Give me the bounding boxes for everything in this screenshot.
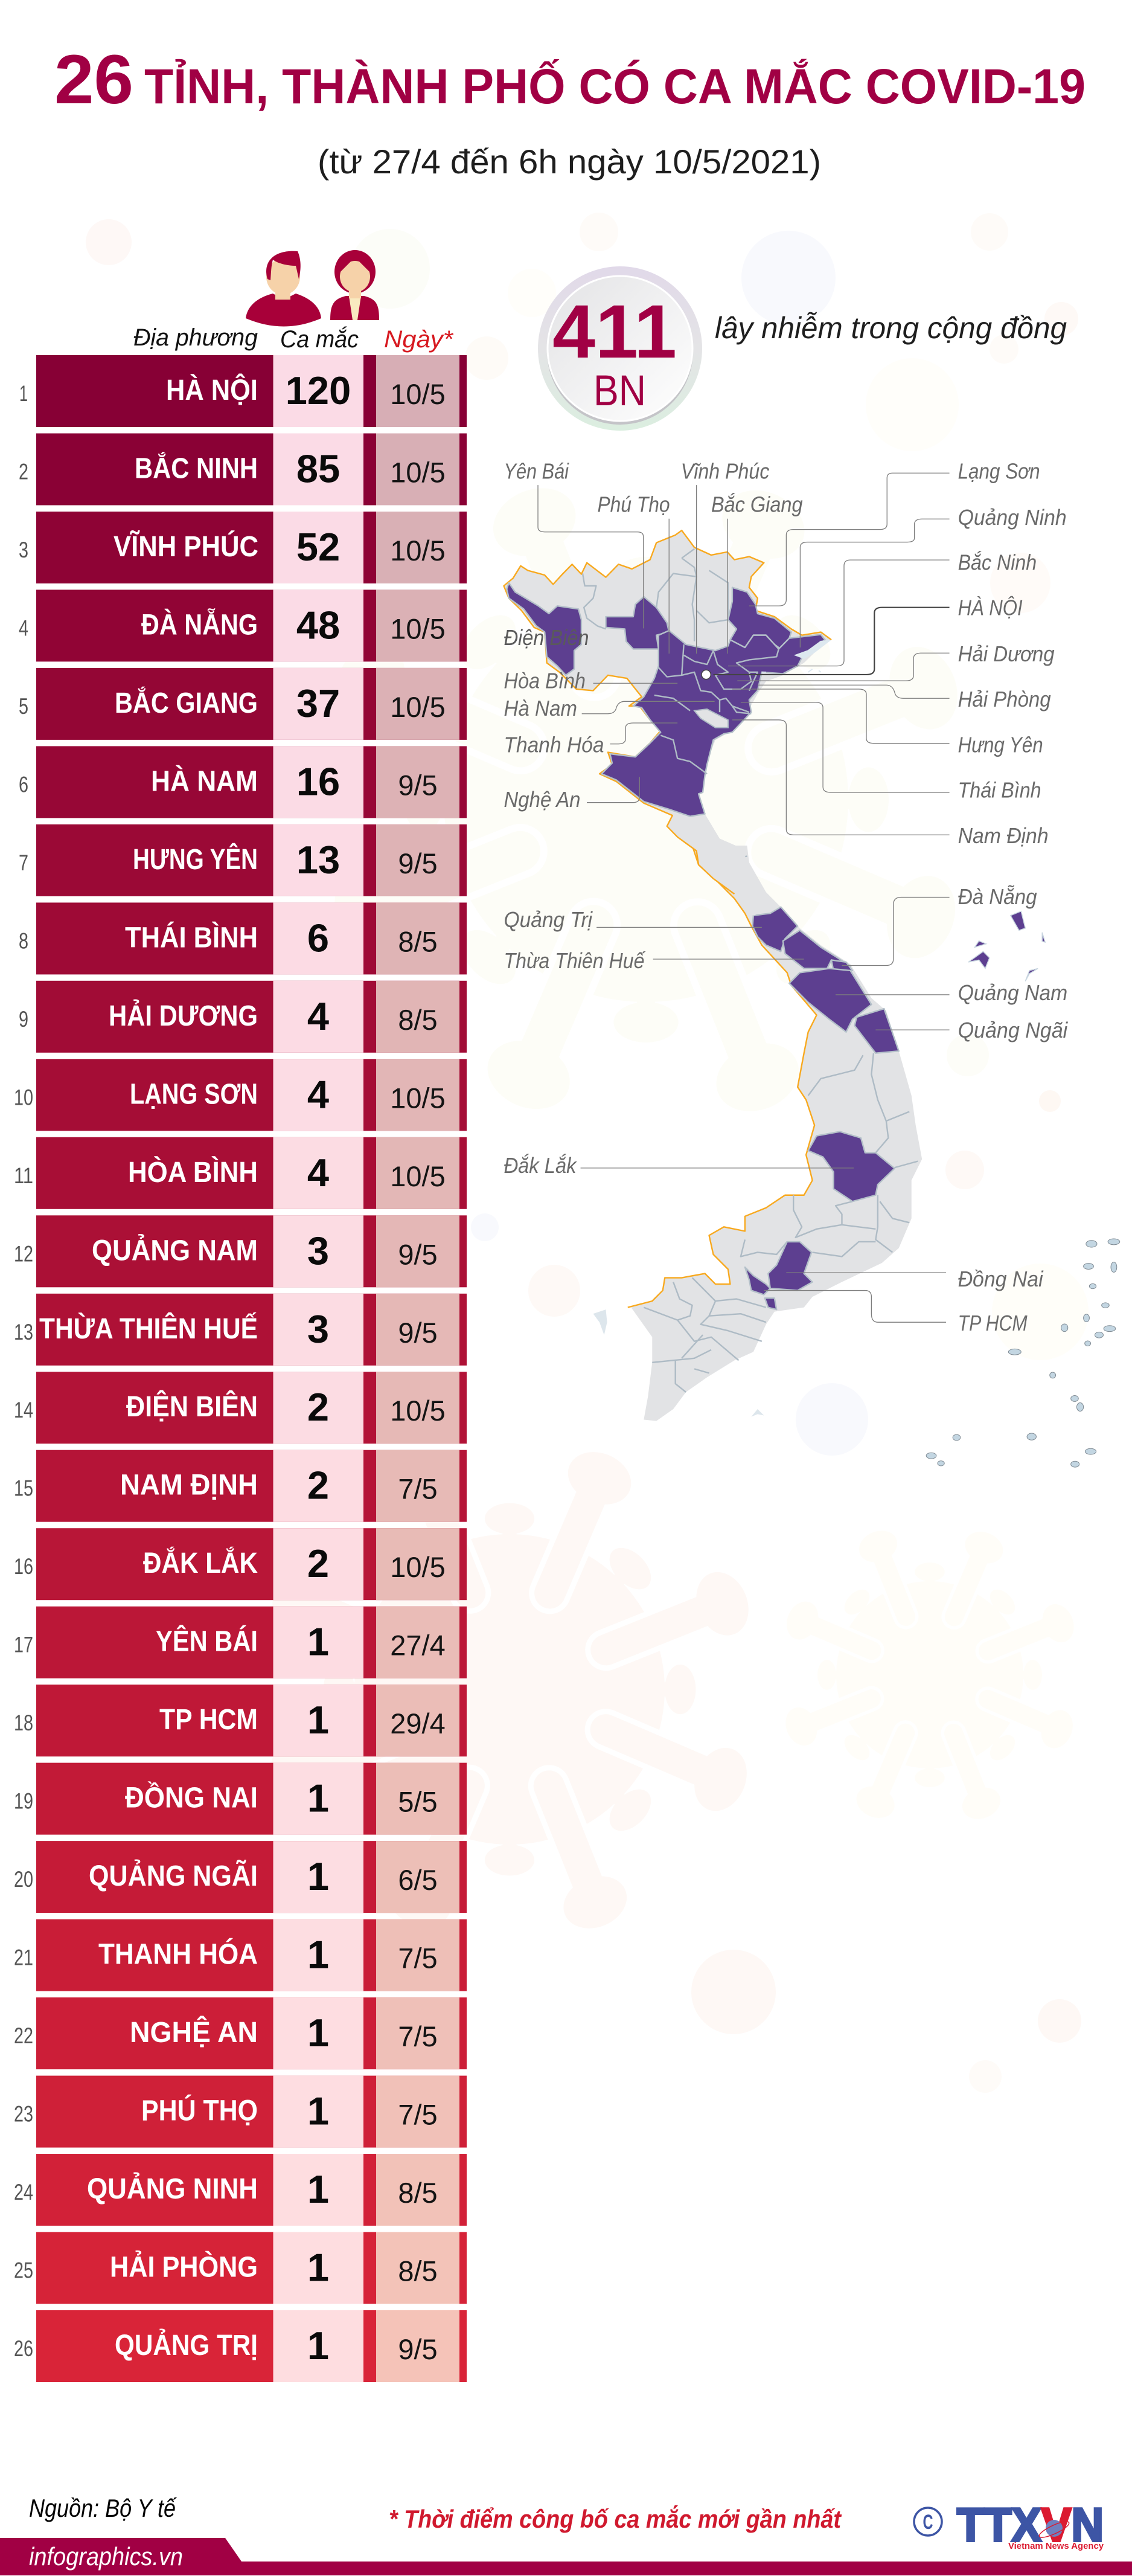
row 3: 3 <box>19 538 28 562</box>
row 14 <box>14 1372 467 1444</box>
column headings: Địa phương <box>133 324 258 351</box>
row 20: 1 <box>307 1854 329 1898</box>
map labels: Quảng Nam <box>958 980 1067 1005</box>
row 22: 1 <box>307 2011 329 2055</box>
map of Vietnam: north <box>504 473 950 916</box>
callout: 411 BN badge: 411 <box>552 290 677 374</box>
table of provinces <box>14 355 467 2382</box>
row 5: BẮC GIANG <box>115 686 258 719</box>
row 3: 10/5 <box>390 535 446 567</box>
row 15: 15 <box>14 1476 33 1501</box>
row 8 <box>19 902 467 974</box>
row 21: 21 <box>14 1945 33 1970</box>
row 26 <box>14 2310 467 2382</box>
row 5: 37 <box>296 681 340 725</box>
row 5: 5 <box>19 694 28 719</box>
map labels <box>504 458 1068 1335</box>
row 23: 1 <box>307 2089 329 2133</box>
row 14: 14 <box>14 1398 33 1422</box>
map labels: Đà Nẵng <box>958 884 1037 909</box>
row 25: 25 <box>14 2258 33 2283</box>
row 6 <box>19 746 467 818</box>
row 1 <box>19 355 467 427</box>
row 7: 9/5 <box>398 847 438 879</box>
Quảng Nam <box>789 968 871 1032</box>
leader lines: central and south <box>581 898 950 1322</box>
row 25 <box>14 2232 467 2304</box>
Ninh Bình (grey) <box>694 709 728 728</box>
column headings: Ngày* <box>384 326 453 353</box>
Yên Bái <box>606 597 669 649</box>
footnote: * Thời điểm công bố ca mắc mới gần nhất <box>389 2504 842 2533</box>
map of Vietnam: south and central <box>581 846 1120 1467</box>
Đồng Nai <box>768 1242 813 1291</box>
row 18: TP HCM <box>159 1704 258 1736</box>
map labels: Thái Bình <box>958 778 1041 802</box>
map labels: Phú Thọ <box>598 492 670 517</box>
row 21 <box>14 1919 467 1991</box>
row 4 <box>19 589 467 661</box>
row 25: 1 <box>307 2246 329 2289</box>
row 6: 9/5 <box>398 769 438 801</box>
Red River delta and Thanh Hóa, Nghệ An <box>601 631 825 817</box>
row 22: 7/5 <box>398 2020 438 2052</box>
row 19: 1 <box>307 1776 329 1820</box>
map labels: HÀ NỘI <box>958 596 1023 620</box>
row 13: 13 <box>14 1320 33 1344</box>
row 19: ĐỒNG NAI <box>125 1781 258 1814</box>
row 12: QUẢNG NAM <box>92 1233 258 1267</box>
source: Nguồn: Bộ Y tế <box>29 2494 177 2522</box>
marker: Hà Nội <box>702 670 711 679</box>
map labels: Đồng Nai <box>958 1267 1044 1291</box>
row 19 <box>14 1763 467 1835</box>
row 10 <box>14 1059 467 1131</box>
row 3 <box>19 512 467 583</box>
row 16: 10/5 <box>390 1551 446 1583</box>
row 7 <box>19 824 467 896</box>
row 23: 7/5 <box>398 2099 438 2131</box>
callout: 411 BN badge <box>538 266 702 431</box>
row 21: THANH HÓA <box>98 1938 258 1971</box>
map labels: Bắc Ninh <box>958 550 1037 575</box>
map labels: Đắk Lắk <box>504 1153 577 1178</box>
map labels: TP HCM <box>958 1311 1028 1335</box>
row 2 <box>19 434 467 505</box>
background decoration: faint dots and viruses <box>86 213 1090 2093</box>
map labels: Hưng Yên <box>958 732 1043 757</box>
row 2: 2 <box>19 459 28 484</box>
map labels: Thừa Thiên Huế <box>504 948 646 973</box>
row 17: YÊN BÁI <box>156 1625 258 1658</box>
row 19: 19 <box>14 1789 33 1814</box>
row 15: NAM ĐỊNH <box>120 1469 258 1502</box>
row 26: QUẢNG TRỊ <box>115 2328 258 2362</box>
row 20: 20 <box>14 1867 33 1892</box>
row 22: NGHỆ AN <box>130 2016 258 2049</box>
map labels: Hà Nam <box>504 696 577 721</box>
row 7: 7 <box>19 850 28 875</box>
title <box>54 41 1086 118</box>
row 22 <box>14 1997 467 2069</box>
Điện Biên <box>507 583 581 675</box>
map labels: Hải Dương <box>958 641 1055 666</box>
row 10: 4 <box>307 1072 329 1116</box>
row 23 <box>14 2076 467 2148</box>
row 4: 4 <box>19 615 28 640</box>
islands: Hoàng Sa <box>968 911 1045 981</box>
row 9: 8/5 <box>398 1004 438 1036</box>
row 20: QUẢNG NGÃI <box>89 1859 258 1892</box>
row 16 <box>14 1528 467 1600</box>
row 1: HÀ NỘI <box>166 373 258 406</box>
row 19: 5/5 <box>398 1786 438 1818</box>
row 4: 48 <box>296 603 340 647</box>
row 24: 1 <box>307 2167 329 2211</box>
row 16: 2 <box>307 1541 329 1585</box>
row 24: 24 <box>14 2180 33 2205</box>
row 10: 10 <box>14 1085 33 1110</box>
row 26: 26 <box>14 2336 33 2361</box>
Quảng Trị <box>752 907 798 951</box>
Lạng Sơn <box>728 588 791 649</box>
map labels: Hải Phòng <box>958 687 1051 711</box>
row 4: ĐÀ NẴNG <box>141 608 258 641</box>
row 9: 9 <box>19 1007 28 1032</box>
row 11: 10/5 <box>390 1160 446 1192</box>
footer website: infographics.vn <box>29 2542 183 2571</box>
row 18 <box>14 1685 467 1756</box>
row 8: 8/5 <box>398 925 438 957</box>
row 9: 4 <box>307 994 329 1038</box>
row 22: 22 <box>14 2023 33 2048</box>
row 5 <box>19 668 467 740</box>
row 11: 4 <box>307 1151 329 1195</box>
map labels: Quảng Ninh <box>958 505 1067 530</box>
map labels: Nam Định <box>958 823 1049 848</box>
row 17: 17 <box>14 1633 33 1657</box>
icon: woman <box>330 250 379 320</box>
row 8: 6 <box>307 916 329 960</box>
row 18: 18 <box>14 1710 33 1735</box>
map labels: Vĩnh Phúc <box>681 458 769 483</box>
row 24: QUẢNG NINH <box>87 2172 258 2205</box>
logo: TTXVN: Vietnam News Agency <box>1008 2541 1104 2551</box>
callout text: lây nhiễm trong cộng đồng <box>715 311 1067 345</box>
row 21: 7/5 <box>398 1942 438 1974</box>
row 13 <box>14 1294 467 1366</box>
row 1: 1 <box>19 381 28 406</box>
Quảng Ninh islets <box>762 641 830 672</box>
row 20: 6/5 <box>398 1864 438 1896</box>
row 6: HÀ NAM <box>151 765 258 797</box>
islands: Phú Quốc and Côn Đảo <box>593 1309 764 1417</box>
callout: 411 BN badge: BN <box>593 367 646 415</box>
map labels: Nghệ An <box>504 787 581 812</box>
map labels: Bắc Giang <box>711 492 803 517</box>
row 3: VĨNH PHÚC <box>114 530 258 563</box>
row 26: 1 <box>307 2324 329 2368</box>
icon: man <box>246 251 321 326</box>
row 8: THÁI BÌNH <box>125 921 258 954</box>
row 25: 8/5 <box>398 2255 438 2287</box>
row 20 <box>14 1841 467 1913</box>
TP HCM <box>745 1267 776 1309</box>
row 12: 9/5 <box>398 1238 438 1270</box>
row 2: BẮC NINH <box>135 452 258 484</box>
row 17: 27/4 <box>390 1630 446 1662</box>
row 12: 3 <box>307 1229 329 1273</box>
row 16: 16 <box>14 1554 33 1579</box>
row 2: 85 <box>296 447 340 490</box>
title: TỈNH, THÀNH PHỐ CÓ CA MẮC COVID-19 <box>144 59 1086 114</box>
row 8: 8 <box>19 928 28 953</box>
islands: Trường Sa <box>926 1239 1120 1467</box>
row 23: PHÚ THỌ <box>141 2094 258 2127</box>
row 3: 52 <box>296 525 340 569</box>
row 21: 1 <box>307 1933 329 1977</box>
footer bar <box>0 2538 1132 2575</box>
row 11: 11 <box>14 1163 33 1188</box>
row 5: 10/5 <box>390 691 446 723</box>
row 2: 10/5 <box>390 457 446 488</box>
Đà Nẵng <box>831 960 852 971</box>
row 10: LẠNG SƠN <box>130 1078 258 1110</box>
row 12 <box>14 1215 467 1287</box>
row 14: 2 <box>307 1385 329 1429</box>
title: 26 <box>54 41 133 118</box>
row 14: ĐIỆN BIÊN <box>126 1390 258 1423</box>
Thừa Thiên Huế <box>783 930 850 968</box>
leader lines: north <box>538 473 950 835</box>
row 1: 120 <box>286 368 351 413</box>
row 7: 13 <box>296 838 340 882</box>
row 4: 10/5 <box>390 612 446 644</box>
row 12: 12 <box>14 1241 33 1266</box>
map labels: Quảng Ngãi <box>958 1018 1068 1042</box>
row 14: 10/5 <box>390 1395 446 1427</box>
row 16: ĐẮK LẮK <box>143 1546 258 1579</box>
row 23: 23 <box>14 2102 33 2127</box>
row 24 <box>14 2154 467 2226</box>
row 18: 29/4 <box>390 1707 446 1739</box>
map labels: Hòa Bình <box>504 668 586 693</box>
row 24: 8/5 <box>398 2177 438 2209</box>
row 15: 7/5 <box>398 1473 438 1505</box>
row 7: HƯNG YÊN <box>133 843 258 876</box>
map labels: Điện Biên <box>504 625 589 650</box>
row 1: 10/5 <box>390 378 446 410</box>
row 17: 1 <box>307 1620 329 1664</box>
row 26: 9/5 <box>398 2333 438 2365</box>
map labels: Lạng Sơn <box>958 458 1040 483</box>
row 13: 3 <box>307 1307 329 1351</box>
row 15 <box>14 1450 467 1522</box>
Đắk Lắk <box>808 1132 895 1201</box>
row 13: THỪA THIÊN HUẾ <box>39 1312 258 1345</box>
Quảng Ngãi <box>854 1009 899 1053</box>
row 25: HẢI PHÒNG <box>110 2250 258 2283</box>
row 15: 2 <box>307 1463 329 1508</box>
logo: TTXVN: C <box>923 2511 933 2534</box>
row 18: 1 <box>307 1698 329 1742</box>
subtitle: (từ 27/4 đến 6h ngày 10/5/2021) <box>318 143 821 181</box>
column headings <box>133 324 453 353</box>
map labels: Thanh Hóa <box>504 732 604 757</box>
row 9: HẢI DƯƠNG <box>109 999 258 1032</box>
row 6: 6 <box>19 772 28 797</box>
map labels: Quảng Trị <box>504 907 593 932</box>
row 11: HÒA BÌNH <box>128 1155 258 1189</box>
leader line: Hà Nội <box>714 608 950 675</box>
row 17 <box>14 1607 467 1678</box>
column headings: Ca mắc <box>280 326 359 353</box>
logo: TTXVN: TTXVN <box>957 2498 1104 2551</box>
row 9 <box>19 981 467 1053</box>
row 6: 16 <box>296 759 340 803</box>
row 11 <box>14 1137 467 1209</box>
map labels: Yên Bái <box>504 458 569 483</box>
row 10: 10/5 <box>390 1082 446 1114</box>
province boundaries in the delta <box>654 644 779 774</box>
row 13: 9/5 <box>398 1317 438 1349</box>
